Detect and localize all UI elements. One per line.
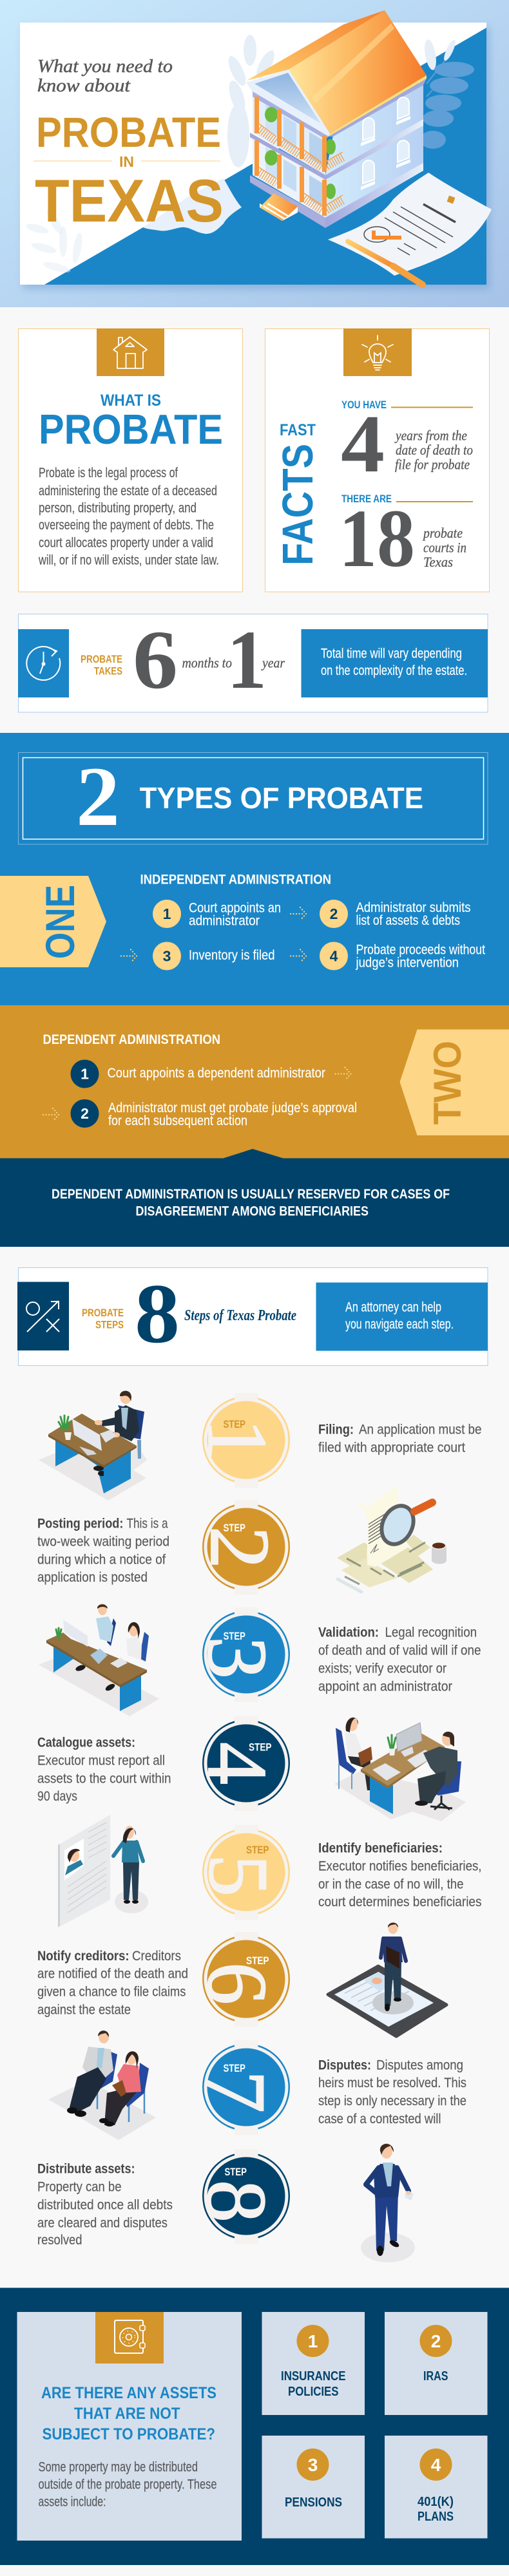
panel: what is probate bbox=[18, 328, 242, 592]
step 8 text bbox=[37, 2161, 173, 2248]
arrow bbox=[43, 1108, 59, 1121]
step 2: 2 bbox=[330, 905, 338, 922]
question text: Some property may be distributed bbox=[39, 2460, 198, 2474]
hero title: PROBATE bbox=[36, 108, 221, 156]
step 3 text bbox=[318, 1625, 481, 1694]
step 4 badge bbox=[190, 1716, 290, 1811]
eight steps bbox=[135, 1266, 296, 1361]
step 1 badge: STEP bbox=[223, 1419, 245, 1430]
step 5 badge: 5 bbox=[191, 1854, 286, 1897]
icon: safe bbox=[95, 2312, 164, 2363]
card 3: pensions bbox=[262, 2436, 365, 2539]
step 2 badge: 2 bbox=[193, 1526, 287, 1569]
fact: four years: years from the bbox=[394, 428, 467, 443]
step 4 bbox=[320, 942, 485, 970]
step 8 text: resolved bbox=[37, 2233, 82, 2248]
wave shape behind title bbox=[143, 178, 242, 234]
step 6 text: given a chance to file claims bbox=[37, 1985, 186, 1999]
question heading bbox=[41, 2384, 216, 2443]
step 3 text: Validation: bbox=[318, 1625, 379, 1640]
step 1 bbox=[71, 1060, 325, 1088]
arrow bbox=[335, 1068, 351, 1081]
step 1 bbox=[153, 900, 281, 929]
step 5 badge: STEP bbox=[246, 1844, 269, 1856]
description text: person, distributing property, and bbox=[39, 501, 197, 515]
step 1 text: filed with appropriate court bbox=[318, 1440, 465, 1455]
step 1 badge bbox=[190, 1393, 290, 1488]
card 3: pensions: PENSIONS bbox=[285, 2496, 342, 2510]
fast facts label: FACTS bbox=[274, 444, 322, 565]
eight steps: Steps of Texas Probate bbox=[184, 1307, 296, 1324]
step 6 text: Notify creditors: bbox=[37, 1949, 129, 1964]
step 3: Inventory is filed bbox=[189, 948, 274, 963]
step 4 text: Executor must report all bbox=[37, 1753, 165, 1768]
step 1: Court appoints a dependent administrator bbox=[107, 1066, 325, 1081]
hero title: IN bbox=[119, 153, 134, 170]
heading: WHAT IS bbox=[101, 392, 161, 410]
step 6 text bbox=[37, 1949, 188, 2017]
card 4: 401(k) plans: 4 bbox=[431, 2455, 441, 2475]
step 8 badge bbox=[189, 2149, 290, 2244]
step 2 text bbox=[37, 1516, 169, 1585]
hero title bbox=[34, 108, 224, 234]
duration: year bbox=[261, 654, 285, 671]
fact: four years: file for probate bbox=[395, 456, 470, 473]
step 1 illustration: man at desk bbox=[39, 1391, 147, 1501]
house illustration bbox=[246, 10, 427, 228]
step 1: Court appoints an bbox=[189, 900, 281, 916]
step 6 text: against the estate bbox=[37, 2003, 131, 2017]
description text bbox=[38, 466, 219, 568]
card 3: pensions: 3 bbox=[308, 2455, 318, 2475]
label: PROBATE bbox=[82, 1307, 124, 1319]
tab: two bbox=[399, 1029, 509, 1135]
step 2 text: This is a bbox=[126, 1516, 168, 1531]
step 2 badge bbox=[193, 1500, 290, 1595]
description text: administering the estate of a deceased bbox=[39, 484, 217, 498]
tab: two: TWO bbox=[426, 1041, 469, 1124]
card 1: insurance policies: POLICIES bbox=[288, 2385, 339, 2399]
fact: eighteen courts: courts in bbox=[423, 540, 466, 555]
decorative leaves, blue bbox=[420, 61, 474, 149]
fact: eighteen courts: Texas bbox=[423, 554, 453, 570]
step 5 badge bbox=[191, 1825, 290, 1920]
step 1 text bbox=[318, 1422, 482, 1455]
callout bbox=[302, 629, 488, 697]
panel: independent administration section bbox=[0, 733, 509, 1005]
step 1: 1 bbox=[163, 905, 171, 922]
step 4 badge: 4 bbox=[190, 1742, 285, 1785]
step 2 bbox=[320, 900, 470, 928]
step 6 text: are notified of the death and bbox=[37, 1967, 188, 1981]
arrow bbox=[121, 949, 137, 962]
step 3 illustration: two people at desk bbox=[39, 1604, 159, 1716]
step 3 text: exists; verify executor or bbox=[318, 1662, 447, 1676]
card 2: iras: IRAS bbox=[423, 2369, 448, 2383]
step 8 illustration: man with card bbox=[361, 2143, 415, 2262]
hero intro text: What you need to bbox=[37, 57, 173, 77]
question panel bbox=[17, 2312, 242, 2541]
callout: An attorney can help bbox=[345, 1300, 441, 1315]
step 7 illustration: couple seated bbox=[48, 2031, 156, 2140]
step 2: list of assets & debts bbox=[356, 913, 460, 928]
step 3 text: Legal recognition bbox=[385, 1625, 477, 1640]
description text: Probate is the legal process of bbox=[39, 466, 178, 480]
step 4 badge: STEP bbox=[249, 1741, 272, 1753]
arrow bbox=[291, 949, 306, 962]
panel: probate takes bbox=[18, 614, 488, 712]
step 5 text: Executor notifies beneficiaries, bbox=[318, 1859, 482, 1874]
step 2: Administrator must get probate judge’s approval bbox=[108, 1101, 357, 1115]
arrow bbox=[291, 907, 306, 920]
description text: court allocates property under a valid bbox=[39, 536, 213, 550]
heading: 2 types of probate: 2 bbox=[76, 749, 120, 844]
icon: strategy bbox=[17, 1282, 69, 1350]
step 2 badge: STEP bbox=[223, 1522, 245, 1534]
callout bbox=[316, 1283, 488, 1351]
step 7 badge bbox=[189, 2040, 290, 2135]
label: STEPS bbox=[95, 1319, 124, 1331]
step 1 badge: 1 bbox=[190, 1419, 285, 1461]
step 1 text: Filing: bbox=[318, 1422, 354, 1437]
step 7 badge: 7 bbox=[189, 2070, 283, 2113]
description text: overseeing the payment of debts. The bbox=[39, 518, 214, 533]
panel: non-probate assets section bbox=[0, 2287, 509, 2565]
duration: months to bbox=[182, 654, 232, 671]
step 2: 2 bbox=[81, 1105, 89, 1122]
callout: dependent administration note: DISAGREEMENT AMONG BENEFICIARIES bbox=[135, 1203, 369, 1218]
step 5 text: court determines beneficiaries bbox=[318, 1895, 482, 1909]
step 3 text: appoint an administrator bbox=[318, 1680, 452, 1694]
step 1: administrator bbox=[189, 913, 260, 929]
panel: dependent administration section bbox=[0, 1005, 509, 1159]
question text: outside of the probate property. These bbox=[39, 2477, 216, 2492]
step 7 text: Disputes among bbox=[376, 2058, 463, 2072]
hero banner bbox=[0, 0, 509, 307]
step 4 text: 90 days bbox=[37, 1789, 77, 1804]
step 3 bbox=[153, 942, 274, 970]
step 8 text: distributed once all debts bbox=[37, 2197, 173, 2213]
card 4: 401(k) plans bbox=[385, 2436, 487, 2539]
card 2: iras: 2 bbox=[431, 2331, 441, 2351]
step 2: for each subsequent action bbox=[108, 1113, 247, 1128]
card 2: iras bbox=[385, 2312, 487, 2415]
callout: dependent administration note bbox=[0, 1149, 509, 1247]
fact: four years: date of death to bbox=[396, 442, 473, 458]
card 4: 401(k) plans: PLANS bbox=[418, 2510, 454, 2524]
card 1: insurance policies: INSURANCE bbox=[281, 2369, 345, 2383]
fact: eighteen courts: THERE ARE bbox=[341, 493, 392, 505]
question heading: SUBJECT TO PROBATE? bbox=[43, 2425, 215, 2443]
callout: you navigate each step. bbox=[345, 1317, 454, 1332]
step 7 text: case of a contested will bbox=[318, 2112, 441, 2126]
icon: light bulb bbox=[343, 328, 412, 376]
front steps bbox=[260, 193, 298, 221]
card 1: insurance policies: 1 bbox=[308, 2331, 318, 2351]
step 2 text: during which a notice of bbox=[37, 1552, 166, 1567]
step 4 illustration: meeting at desk bbox=[334, 1717, 466, 1821]
step 7 text: heirs must be resolved. This bbox=[318, 2076, 466, 2090]
step 2 text: application is posted bbox=[37, 1570, 148, 1585]
step 8 badge: 8 bbox=[189, 2180, 284, 2222]
subheading: DEPENDENT ADMINISTRATION bbox=[43, 1032, 220, 1047]
icon: clock bbox=[18, 629, 69, 697]
tab: one bbox=[0, 876, 106, 967]
step 1: 1 bbox=[81, 1065, 89, 1082]
step 6 text: Creditors bbox=[132, 1949, 181, 1964]
step 5 text: or in the case of no will, the bbox=[318, 1877, 464, 1892]
step 7 text bbox=[318, 2058, 466, 2126]
decorative leaves, pale bbox=[25, 35, 457, 274]
step 4 text: Catalogue assets: bbox=[37, 1735, 135, 1750]
card 1: insurance policies bbox=[262, 2312, 365, 2415]
callout: on the complexity of the estate. bbox=[321, 663, 467, 678]
tab: one: ONE bbox=[38, 885, 83, 959]
step 3 badge: STEP bbox=[223, 1631, 245, 1642]
step 6 badge bbox=[190, 1932, 290, 2027]
question text: assets include: bbox=[39, 2495, 106, 2509]
step 1 text: An application must be bbox=[359, 1422, 482, 1437]
duration: 1 bbox=[227, 614, 267, 706]
duration bbox=[133, 614, 285, 706]
label: TAKES bbox=[94, 665, 122, 677]
question heading: THAT ARE NOT bbox=[74, 2405, 180, 2423]
label bbox=[82, 1307, 124, 1331]
step 8 badge: STEP bbox=[224, 2166, 247, 2178]
label bbox=[81, 653, 122, 677]
hero intro text bbox=[37, 57, 173, 96]
step 2 text: two-week waiting period bbox=[37, 1534, 169, 1549]
step 4: 4 bbox=[330, 948, 338, 965]
step 6 badge: STEP bbox=[246, 1955, 269, 1967]
question text bbox=[39, 2460, 216, 2509]
question heading: ARE THERE ANY ASSETS bbox=[41, 2384, 216, 2402]
icon: house bbox=[97, 328, 164, 376]
hero title: TEXAS bbox=[35, 167, 224, 234]
step 8 text: Distribute assets: bbox=[37, 2161, 135, 2177]
fact: four years: YOU HAVE bbox=[341, 399, 387, 411]
panel: probate steps header bbox=[17, 1266, 488, 1365]
step 5 text: Identify beneficiaries: bbox=[318, 1841, 443, 1856]
step 3 badge bbox=[190, 1607, 290, 1702]
step 8 text: are cleared and disputes bbox=[37, 2215, 168, 2231]
step 2: Administrator submits bbox=[356, 900, 470, 915]
step 6 illustration: man on tablet bbox=[328, 1922, 447, 2036]
step 4: Probate proceeds without bbox=[356, 943, 485, 957]
fast facts label: FAST bbox=[280, 421, 316, 439]
step 5 text bbox=[318, 1841, 482, 1909]
fact: eighteen courts: probate bbox=[422, 525, 463, 541]
step 6 badge: 6 bbox=[190, 1962, 285, 2005]
subheading: INDEPENDENT ADMINISTRATION bbox=[140, 872, 331, 887]
step 5 illustration: woman at notice board bbox=[58, 1815, 148, 1927]
callout: Total time will vary depending bbox=[321, 647, 462, 661]
fact: four years: 4 bbox=[341, 398, 385, 489]
step 2 bbox=[71, 1099, 357, 1128]
step 4 text: assets to the court within bbox=[37, 1771, 171, 1786]
step 4 text bbox=[37, 1735, 171, 1804]
heading: 2 types of probate: TYPES OF PROBATE bbox=[139, 781, 423, 815]
step 2 text: Posting period: bbox=[37, 1516, 124, 1531]
heading: PROBATE bbox=[39, 406, 223, 453]
card 4: 401(k) plans: 401(K) bbox=[418, 2495, 454, 2509]
label: PROBATE bbox=[81, 653, 122, 665]
step 7 badge: STEP bbox=[223, 2063, 245, 2074]
step 8 text: Property can be bbox=[37, 2179, 121, 2195]
eight steps: 8 bbox=[135, 1266, 180, 1361]
fact: eighteen courts bbox=[339, 493, 473, 584]
step 3: 3 bbox=[163, 948, 171, 965]
description text: will, or if no will exists, under state law. bbox=[38, 553, 219, 568]
step 3 badge: 3 bbox=[190, 1636, 285, 1679]
panel: fast facts bbox=[265, 328, 490, 592]
heading: 2 types of probate bbox=[18, 749, 488, 844]
fact: four years bbox=[341, 398, 473, 489]
step 4: judge’s intervention bbox=[356, 956, 459, 970]
document and pen bbox=[328, 173, 492, 285]
step 7 text: step is only necessary in the bbox=[318, 2094, 466, 2108]
step 2 illustration: documents and magnifier bbox=[337, 1486, 447, 1592]
step 3 text: of death and of valid will if one bbox=[318, 1643, 481, 1658]
fact: eighteen courts: 18 bbox=[339, 493, 415, 584]
step 7 text: Disputes: bbox=[318, 2058, 371, 2072]
hero intro text: know about bbox=[37, 76, 131, 96]
duration: 6 bbox=[133, 614, 178, 706]
